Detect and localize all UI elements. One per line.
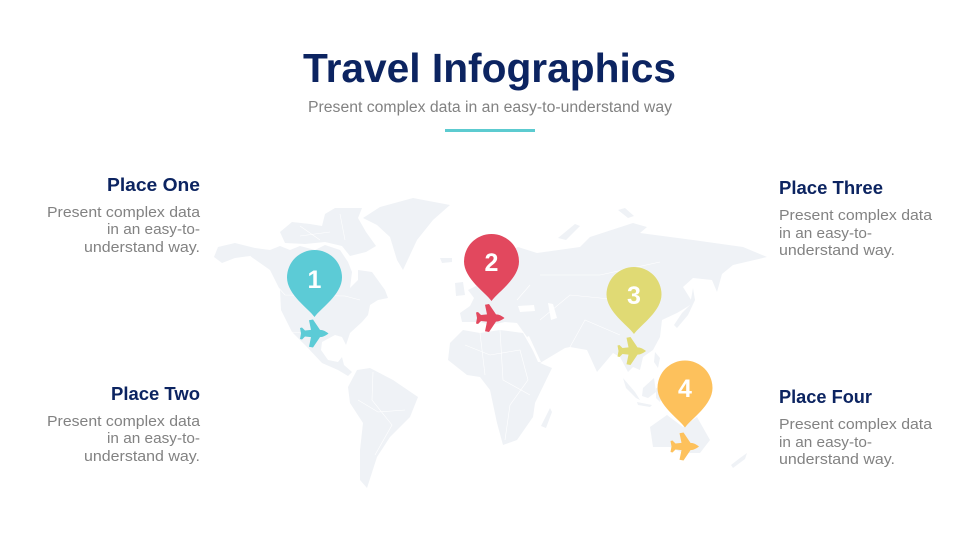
panel: place three: in an easy-to- — [779, 225, 872, 242]
panel: place four: in an easy-to- — [779, 434, 872, 451]
panel: place one — [47, 174, 201, 256]
pin 1 with plane — [287, 250, 342, 348]
title: Travel Infographics — [303, 45, 676, 91]
pin 4 with plane — [658, 361, 712, 460]
panel: place four — [779, 386, 933, 468]
panel: place two: in an easy-to- — [107, 430, 200, 447]
pin 1 with plane: 1 — [308, 266, 322, 294]
world map — [214, 198, 767, 488]
panel: place three: Present complex data — [779, 207, 933, 224]
pin 2 with plane — [464, 234, 519, 332]
pin 3 with plane: 3 — [627, 282, 641, 310]
panel: place two: understand way. — [84, 448, 200, 465]
panel: place three — [779, 177, 933, 259]
pin 2 with plane: 2 — [485, 249, 498, 277]
title underline — [445, 129, 535, 132]
pin 4 with plane: 4 — [678, 375, 692, 403]
subtitle: Present complex data in an easy-to-understand way — [308, 99, 672, 116]
panel: place one: understand way. — [84, 239, 200, 256]
pin 3 with plane — [606, 267, 662, 365]
panel: place three: Place Three — [779, 177, 883, 198]
panel: place three: understand way. — [779, 242, 895, 259]
panel: place two: Present complex data — [47, 413, 201, 430]
panel: place two: Place Two — [111, 383, 200, 404]
panel: place two — [47, 383, 201, 465]
panel: place one: Place One — [107, 174, 200, 195]
panel: place one: Present complex data — [47, 204, 201, 221]
panel: place four: understand way. — [779, 451, 895, 468]
panel: place four: Place Four — [779, 386, 872, 407]
panel: place four: Present complex data — [779, 416, 933, 433]
panel: place one: in an easy-to- — [107, 221, 200, 238]
